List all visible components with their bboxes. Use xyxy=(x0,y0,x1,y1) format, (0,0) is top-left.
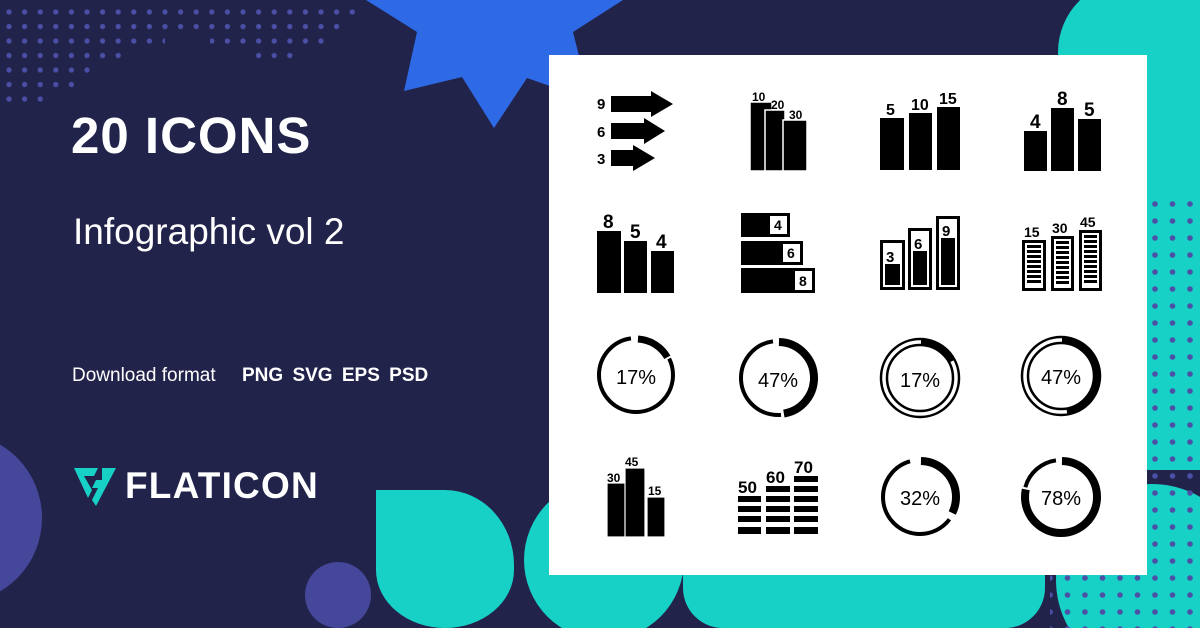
icon: double ring 17%: 17% xyxy=(900,370,940,392)
icon: bars 30 45 15: 15 xyxy=(648,484,662,498)
star xyxy=(366,0,623,128)
teal pill top right xyxy=(1058,0,1200,470)
icon: donut 17% xyxy=(599,338,673,412)
icon: overlapping bars 10 20 30 xyxy=(750,90,807,171)
icon: overlapping bars 10 20 30: 30 xyxy=(789,108,803,122)
icon: outlined bars 3 6 9 xyxy=(880,216,960,290)
teal bottom band xyxy=(683,450,1045,628)
icon: donut 17%: 17% xyxy=(616,367,656,389)
icon: bars 8 5 4 xyxy=(597,212,674,293)
icon: bars 4 8 5: 8 xyxy=(1057,89,1068,110)
icon: horizontal bars 4 6 8: 6 xyxy=(787,245,795,261)
subtitle: Infographic vol 2 xyxy=(73,211,345,252)
icon: arrows xyxy=(597,91,673,171)
big purple left circle xyxy=(0,434,42,602)
icon: bars 5 10 15: 10 xyxy=(911,97,929,114)
text: PNG SVG EPS PSD xyxy=(242,365,428,386)
dots right xyxy=(1145,195,1200,575)
icon: donut 32% xyxy=(883,460,957,534)
icon: donut 47%: 47% xyxy=(758,370,798,392)
icon: stacked blocks 50 60 70: 70 xyxy=(794,458,813,477)
icon: outlined bars 3 6 9: 9 xyxy=(942,223,950,240)
icon: outlined bars 3 6 9: 3 xyxy=(886,249,894,266)
download formats: Download format xyxy=(72,365,216,386)
white panel xyxy=(549,55,1147,575)
icon: stacked blocks 50 60 70: 60 xyxy=(766,468,785,487)
teal drop xyxy=(376,490,514,628)
icon: donut 32%: 32% xyxy=(900,488,940,510)
icon: double ring 47% xyxy=(1022,337,1100,415)
icon: donut 47% xyxy=(741,341,815,415)
icon: horizontal bars 4 6 8: 4 xyxy=(774,217,782,233)
icon: bars 8 5 4: 8 xyxy=(603,212,614,233)
icon: battery bars 15 30 45: 30 xyxy=(1052,220,1068,236)
logo text: FLATICON xyxy=(125,465,319,506)
icon: bars 5 10 15: 15 xyxy=(939,91,957,108)
title: 20 ICONS xyxy=(71,107,311,164)
icon: donut 78% xyxy=(1024,460,1098,534)
icon: battery bars 15 30 45 xyxy=(1022,214,1102,291)
icon: donut 78%: 78% xyxy=(1041,488,1081,510)
icon: bars 4 8 5: 5 xyxy=(1084,100,1095,121)
icon: horizontal bars 4 6 8 xyxy=(741,213,815,293)
icon: stacked blocks 50 60 70 xyxy=(738,458,818,534)
icon: flaticon mark xyxy=(74,468,116,506)
teal circle middle xyxy=(524,480,684,628)
icon: bars 30 45 15: 30 xyxy=(607,471,621,485)
logo xyxy=(74,465,319,506)
icon: double ring 47%: 47% xyxy=(1041,367,1081,389)
icon: arrows: 9 xyxy=(597,96,605,113)
icon: outlined bars 3 6 9: 6 xyxy=(914,236,922,253)
icon: overlapping bars 10 20 30: 10 xyxy=(752,90,766,104)
icon: arrows: 6 xyxy=(597,124,605,141)
icon: overlapping bars 10 20 30: 20 xyxy=(771,98,785,112)
icon: bars 4 8 5 xyxy=(1024,89,1101,171)
icon: bars 5 10 15 xyxy=(880,91,960,170)
teal circle bottom right xyxy=(1056,484,1200,628)
icon: arrows: 3 xyxy=(597,151,605,168)
small purple circle xyxy=(305,562,371,628)
icon: bars 8 5 4: 5 xyxy=(630,222,641,243)
dots top-left xyxy=(0,5,362,105)
icon: bars 30 45 15: 45 xyxy=(625,455,639,469)
icon: bars 30 45 15 xyxy=(607,455,665,537)
icon: double ring 17% xyxy=(881,339,959,417)
download formats xyxy=(72,365,428,386)
icon: bars 4 8 5: 4 xyxy=(1030,112,1041,133)
icon: battery bars 15 30 45: 15 xyxy=(1024,224,1040,240)
icon: horizontal bars 4 6 8: 8 xyxy=(799,273,807,289)
icon: battery bars 15 30 45: 45 xyxy=(1080,214,1096,230)
icon: bars 5 10 15: 5 xyxy=(886,102,895,119)
icon: bars 8 5 4: 4 xyxy=(656,232,667,253)
icon: stacked blocks 50 60 70: 50 xyxy=(738,478,757,497)
